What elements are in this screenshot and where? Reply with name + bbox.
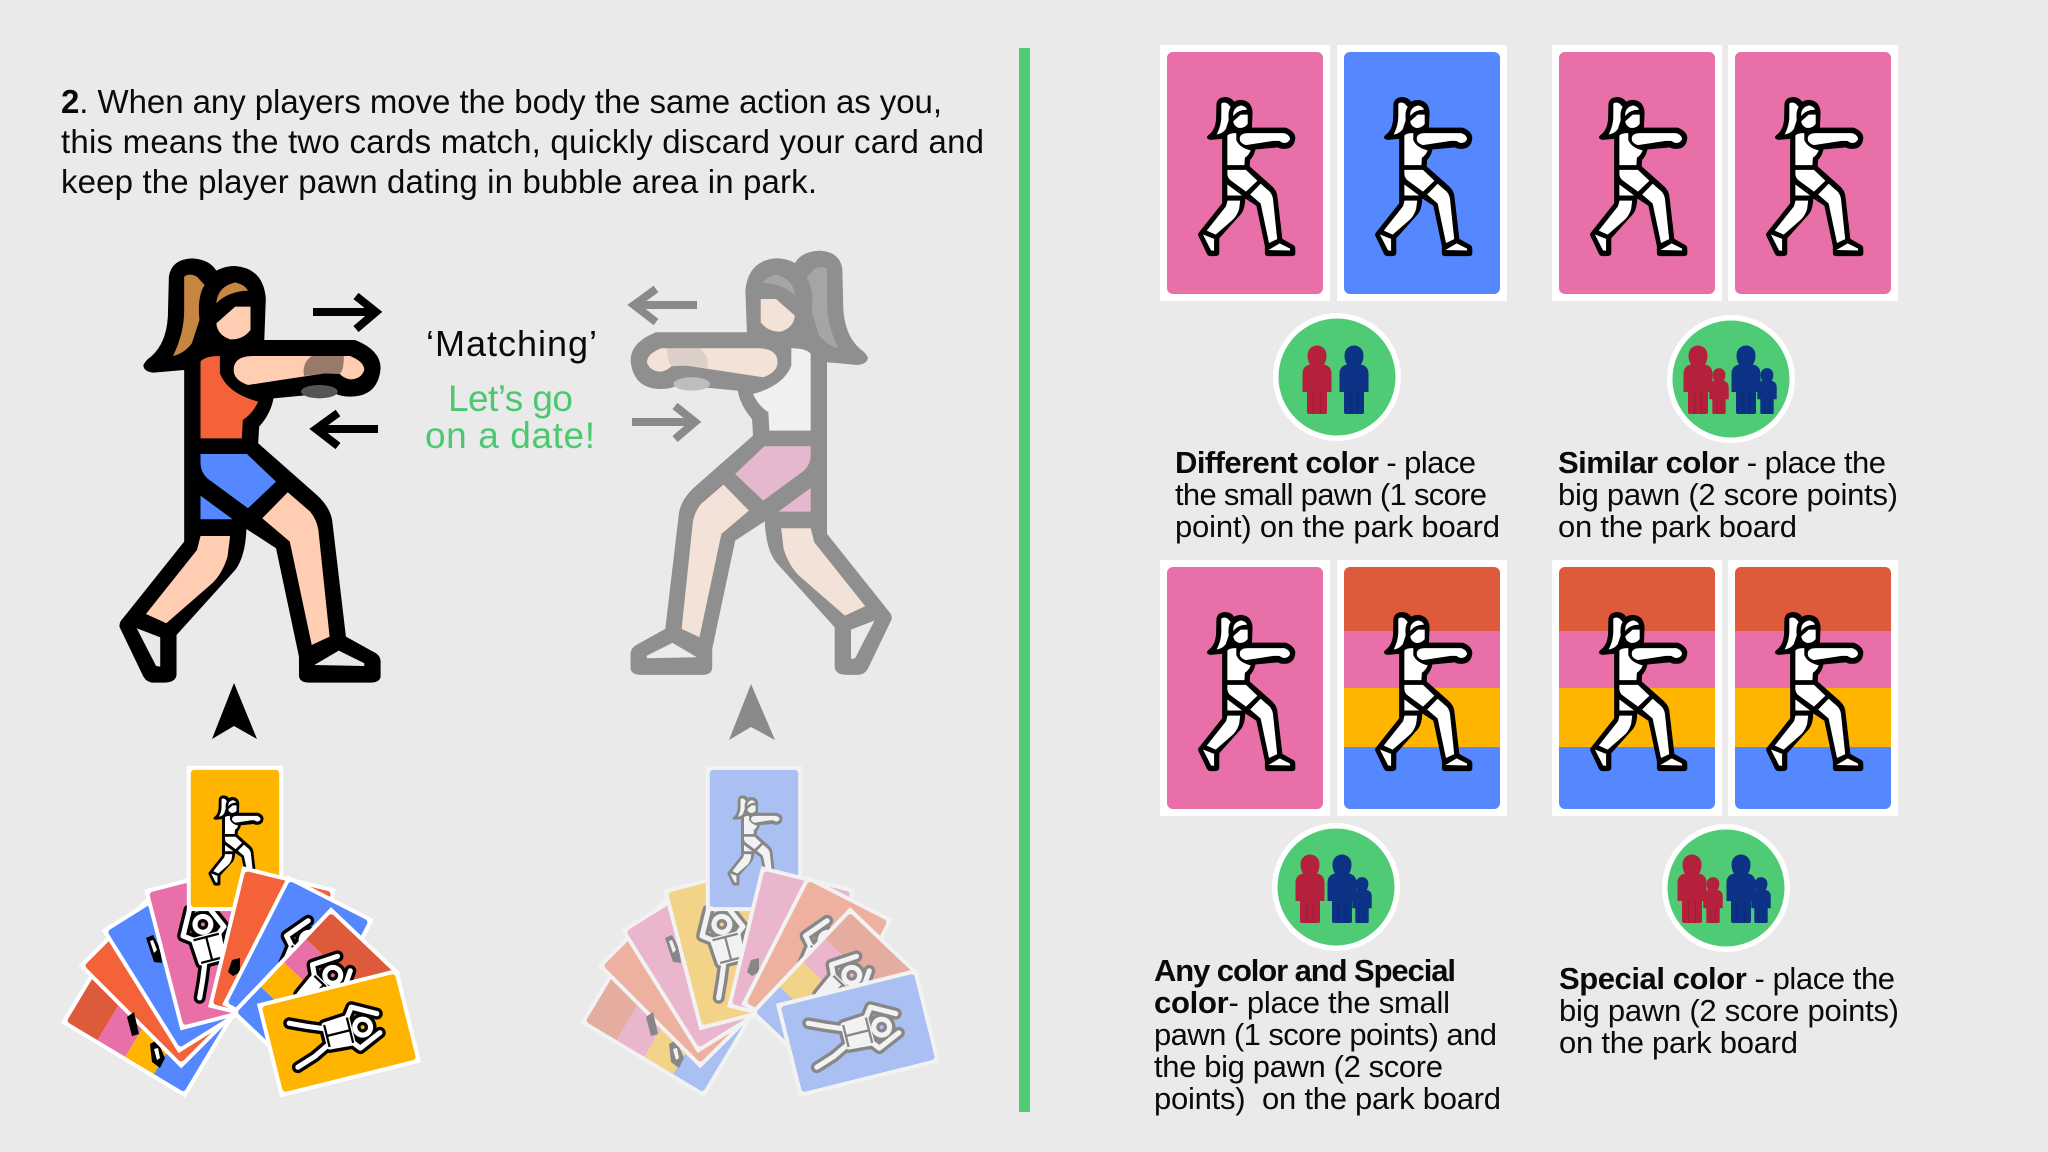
text: any color and special rule: pawn (1 score points) and bbox=[1154, 1017, 1497, 1052]
arrow: up from right hand bbox=[729, 684, 775, 740]
panel: special color bbox=[1552, 560, 1899, 1060]
panel: different color bbox=[1160, 45, 1507, 544]
card pair: striped and striped bbox=[1552, 560, 1898, 816]
arrow: up from left hand bbox=[212, 683, 257, 739]
panel: left matching explanation bbox=[61, 83, 984, 1098]
label: Let's go on a date: on a date! bbox=[425, 415, 595, 456]
text: different color rule bbox=[1175, 445, 1500, 544]
arrows: left dancer motion bbox=[313, 296, 378, 446]
arrows: right dancer motion bbox=[632, 289, 697, 439]
text: any color and special rule: Any color and Special bbox=[1154, 953, 1456, 988]
icon: green circle with three pawns bbox=[1272, 823, 1400, 951]
text: special color rule: big pawn (2 score points) bbox=[1559, 993, 1899, 1028]
text: any color and special rule bbox=[1154, 953, 1501, 1116]
text: any color and special rule: color- place the small bbox=[1154, 985, 1450, 1020]
text: special color rule: Special color - place the bbox=[1559, 961, 1895, 996]
heading paragraph: keep the player pawn dating in bubble area in park. bbox=[61, 163, 817, 200]
label: Matching: ‘Matching’ bbox=[426, 323, 597, 364]
heading paragraph: 2. When any players move the body the same action as you, bbox=[61, 83, 942, 120]
figure: faded mirrored dancer bbox=[631, 251, 892, 675]
text: special color rule: on the park board bbox=[1559, 1025, 1798, 1060]
icon: green circle with two pawns bbox=[1273, 313, 1401, 441]
heading paragraph: this means the two cards match, quickly discard your card and bbox=[61, 123, 984, 160]
panel: any color and special color bbox=[1154, 560, 1507, 1116]
heading paragraph bbox=[61, 83, 984, 200]
text: different color rule: Different color - place bbox=[1175, 445, 1476, 480]
figure: coloured dancer bbox=[119, 258, 381, 683]
label: Let's go on a date: Let’s go bbox=[448, 378, 573, 419]
card pair: pink and blue bbox=[1160, 45, 1507, 301]
text: different color rule: the small pawn (1 score bbox=[1175, 477, 1487, 512]
card fan: player two faded bbox=[580, 766, 940, 1098]
text: special color rule bbox=[1559, 961, 1899, 1060]
label: Let's go on a date bbox=[425, 378, 595, 456]
card pair: pink and striped bbox=[1160, 560, 1507, 816]
text: similar color rule: on the park board bbox=[1558, 509, 1797, 544]
card fan: player one bbox=[61, 766, 421, 1098]
card pair: pink and pink bbox=[1552, 45, 1898, 301]
text: similar color rule bbox=[1558, 445, 1898, 544]
text: similar color rule: big pawn (2 score points) bbox=[1558, 477, 1898, 512]
text: any color and special rule: points) on the park board bbox=[1154, 1081, 1501, 1116]
text: any color and special rule: the big pawn (2 score bbox=[1154, 1049, 1443, 1084]
panel: similar color bbox=[1552, 45, 1898, 544]
icon: green circle with four pawns bbox=[1667, 315, 1795, 443]
icon: green circle with four pawns bbox=[1662, 824, 1790, 952]
text: different color rule: point) on the park board bbox=[1175, 509, 1500, 544]
text: similar color rule: Similar color - place the bbox=[1558, 445, 1886, 480]
